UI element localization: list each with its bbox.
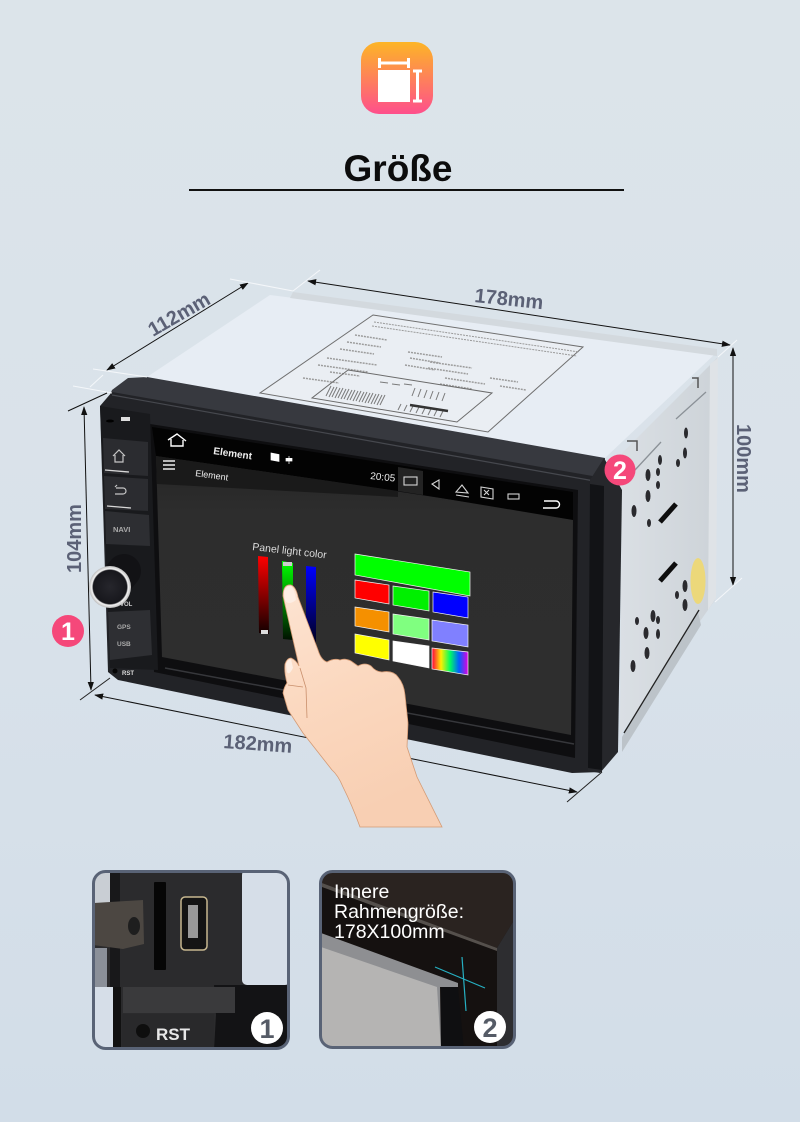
dimension: 182mm [95, 695, 602, 802]
marker 2 [604, 454, 636, 486]
reset label: RST [156, 1025, 191, 1044]
hand pointing at screen [283, 585, 442, 827]
button labels [113, 525, 134, 677]
inner frame size note [334, 881, 464, 943]
panel: detail 2 inner frame [319, 870, 517, 1050]
grey screen [321, 947, 441, 1050]
fingernails [284, 586, 296, 673]
touchscreen [152, 427, 573, 735]
inner frame size note: 178X100mm [334, 921, 445, 943]
title underline [189, 189, 624, 191]
button labels: GPS [117, 624, 131, 631]
sliders [258, 556, 316, 645]
silver edge [321, 933, 458, 1050]
icon: size app icon [361, 42, 433, 114]
volume label: VOL [120, 602, 133, 608]
bottom trim of screen [165, 668, 574, 744]
marker 2: 2 [613, 457, 627, 485]
top face of housing [147, 295, 717, 458]
left button column [89, 406, 158, 677]
bezel front frame [100, 392, 604, 773]
marker 1 [52, 615, 84, 647]
mounting holes [630, 428, 688, 672]
status bar text: 20:05 [370, 471, 396, 485]
mounting hooks [627, 378, 698, 451]
product: car radio unit [89, 292, 718, 773]
dimension: 104mm: 104mm [64, 504, 86, 573]
mounting slots [660, 504, 676, 581]
status bar text: Element [213, 446, 253, 462]
button labels: RST [122, 671, 134, 677]
cyan crosshair [435, 957, 485, 1011]
dimension: 182mm: 182mm [223, 731, 293, 758]
title: Größe [344, 148, 452, 189]
icon: home button [113, 450, 125, 462]
inner frame size note: Innere [334, 881, 389, 903]
color swatches [355, 554, 470, 675]
android nav icons [404, 477, 560, 508]
badge 1 [251, 1012, 283, 1044]
panel: detail 1 ports [92, 870, 290, 1050]
button labels: USB [117, 641, 131, 648]
volume knob [89, 566, 131, 608]
frame [94, 872, 288, 1048]
inner frame size note: Rahmengröße: [334, 901, 464, 923]
dimension: 112mm [68, 270, 320, 411]
frame [320, 872, 514, 1048]
icon: back button [115, 485, 126, 494]
badge 1: 1 [259, 1014, 275, 1044]
icon: gallery and usb [271, 453, 292, 464]
marker 1: 1 [61, 618, 75, 646]
bezel top rim [108, 377, 605, 490]
inner screen recess [150, 424, 578, 758]
mini usb port [181, 897, 207, 950]
panel light color label: Panel light color [252, 541, 328, 561]
badge 2 [474, 1011, 506, 1043]
dimension: 112mm: 112mm [144, 288, 214, 341]
bezel right side [588, 458, 622, 773]
card slot [154, 882, 166, 970]
badge 2: 2 [482, 1013, 498, 1043]
reset hole [136, 1024, 150, 1038]
status bar text: Element [195, 468, 229, 483]
status bar text [195, 446, 396, 485]
dimension: 100mm: 100mm [732, 424, 754, 493]
dimension: 178mm [308, 281, 737, 357]
icon: home [168, 434, 186, 446]
metal clip [93, 900, 144, 949]
button labels: NAVI [113, 525, 130, 534]
warranty sticker [690, 558, 706, 604]
dimension: 104mm [64, 407, 110, 700]
icon: menu [163, 461, 175, 469]
metal side panel [620, 358, 718, 752]
dimension: 100mm [715, 348, 754, 602]
wiring diagram label [260, 315, 583, 432]
thumb crease [288, 668, 307, 718]
rear lip of housing [290, 292, 717, 356]
dimension: 178mm: 178mm [473, 285, 544, 314]
